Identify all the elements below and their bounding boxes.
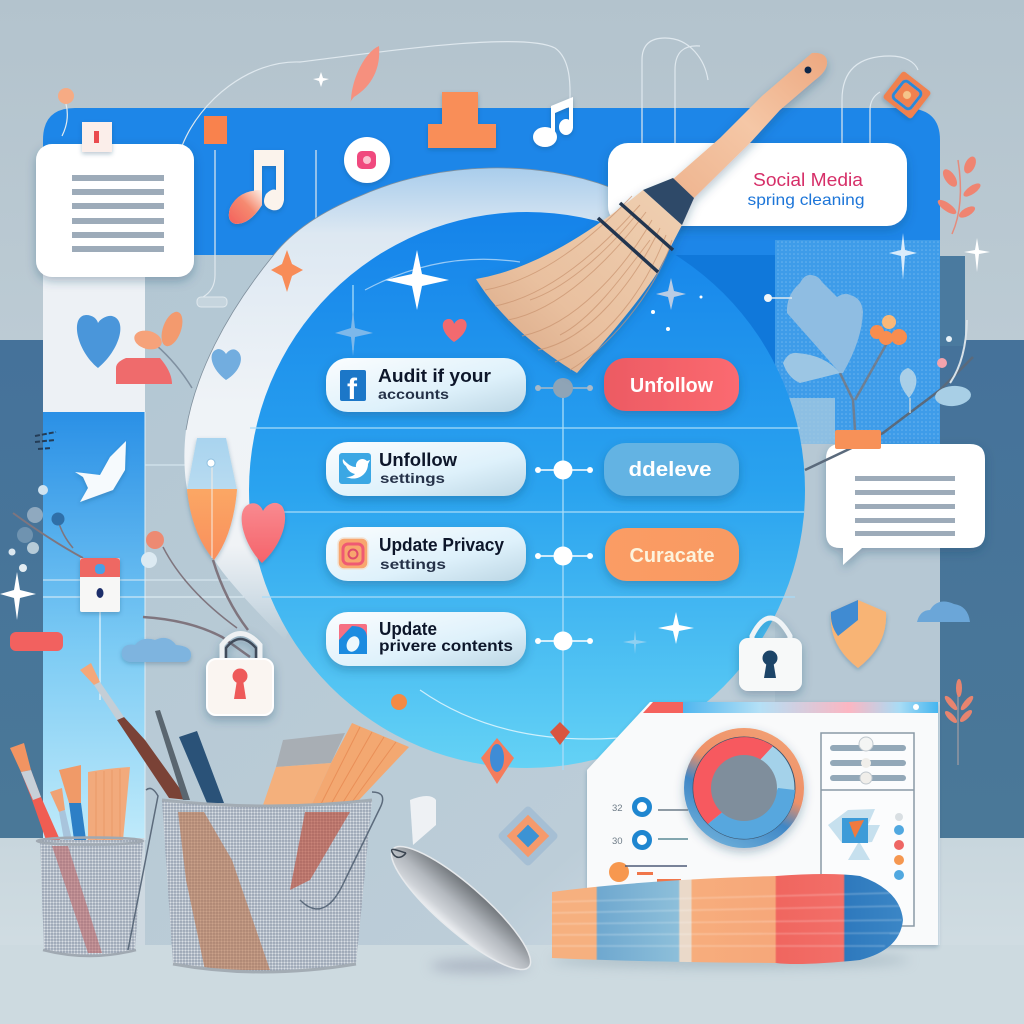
- pill: update contents: privere contents: [379, 638, 513, 655]
- broom: [476, 53, 827, 373]
- bristle strands: [485, 196, 672, 370]
- pill: update privacy: settings: [380, 556, 446, 572]
- flat brushes: [262, 723, 409, 808]
- pill: audit accounts: accounts: [378, 387, 449, 402]
- icon: orange stamp block: [428, 92, 496, 148]
- title card: spring cleaning: [748, 192, 864, 209]
- button: curate: [605, 528, 739, 581]
- icon: sparkle top: [313, 72, 329, 87]
- decorative wire loops: [182, 38, 918, 297]
- broom ferrule: [643, 178, 694, 225]
- row 1: audit accounts: [326, 358, 739, 412]
- pill: unfollow settings: Unfollow: [379, 450, 458, 470]
- title card: [608, 143, 907, 226]
- connector node: [535, 632, 593, 650]
- icon: coral music note: [229, 150, 284, 224]
- pill: unfollow settings: [326, 442, 526, 496]
- connector node: [535, 378, 593, 398]
- title card: Social Media: [753, 170, 864, 190]
- icon: folded paper: [410, 796, 436, 845]
- window top bar: [643, 702, 938, 713]
- donut chart: [684, 728, 804, 848]
- connector node: [535, 546, 593, 566]
- row 4: update private contents: [326, 612, 593, 666]
- pill: audit accounts: f: [347, 373, 358, 406]
- timeline grid lines: [250, 285, 804, 770]
- button: delete: [604, 443, 739, 496]
- brush streaks: [552, 893, 902, 946]
- sparkle stars inside circle: [335, 250, 702, 654]
- left document card: [36, 144, 194, 277]
- tick marks left: [35, 432, 56, 449]
- metal lid: [378, 832, 544, 984]
- main window panel: [43, 108, 940, 945]
- icon: small blue heart: [212, 349, 241, 380]
- icon: white music note: [533, 97, 573, 147]
- button: unfollow: [604, 358, 739, 411]
- broom bands: [598, 203, 673, 272]
- icon: leaf sprig lower right: [943, 679, 975, 765]
- icon: leaf sprig right: [936, 155, 982, 234]
- icon: red diamond on circle: [550, 722, 570, 745]
- small basket rims: [37, 838, 143, 956]
- icon: blue plant illustration: [764, 275, 973, 470]
- pill: update contents: Update: [379, 619, 437, 639]
- red tag on card: [82, 122, 112, 152]
- icon: vase: [187, 438, 237, 560]
- right speech bubble: [826, 444, 985, 565]
- items through mesh: [178, 812, 270, 970]
- icon: colourful tile: [497, 805, 559, 867]
- handle hole: [804, 66, 812, 74]
- heart in circle: [443, 319, 467, 342]
- small mesh basket with brushes: [10, 743, 143, 956]
- pill: update privacy: Update Privacy: [379, 535, 504, 555]
- icon: coral heart: [242, 503, 285, 563]
- icon: blue heart left: [77, 315, 120, 368]
- icon: padlock right: [739, 618, 802, 691]
- sparkles right: [889, 233, 990, 280]
- icon: branches with buds: [8, 485, 250, 657]
- hanging wire tag: [197, 297, 227, 307]
- small basket body: [40, 840, 143, 956]
- pill: audit accounts: Audit if your: [378, 366, 491, 386]
- row 2: unfollow settings: [326, 442, 739, 496]
- icon: instagram circle: [344, 137, 390, 183]
- window body: [587, 702, 938, 945]
- tall brushes: [80, 663, 224, 803]
- icon: twitter bird: [75, 441, 126, 502]
- pill: unfollow settings: settings: [380, 470, 445, 486]
- icon: small flower top left: [58, 88, 74, 136]
- red brush through mesh: [52, 846, 102, 953]
- legend rows: 32: [612, 803, 623, 814]
- icon: red pill: [10, 632, 63, 651]
- pill: update contents: [326, 612, 526, 666]
- button: curate: Curacate: [630, 545, 714, 567]
- icon: orange bead: [391, 694, 407, 710]
- dashboard window: [587, 702, 938, 945]
- icon: gem: [481, 738, 514, 784]
- icon: orange leaves and pill: [116, 309, 192, 388]
- pill: update privacy: [326, 527, 526, 581]
- row 3: update privacy settings: [326, 527, 739, 581]
- legend rows: 30: [612, 836, 623, 847]
- icon: sparkle left: [0, 572, 36, 620]
- broom handle: [672, 53, 827, 198]
- button: delete: ddeleve: [628, 459, 712, 481]
- legend rows: [609, 800, 688, 883]
- small brushes: [10, 743, 130, 840]
- icon: pink feather: [350, 46, 379, 102]
- icon: orange star: [271, 250, 303, 292]
- connector node: [535, 460, 593, 480]
- large striped paint brush: [550, 874, 910, 968]
- pill: audit accounts: [326, 358, 526, 412]
- side settings box: [821, 733, 914, 926]
- large circle with white crescent: [184, 168, 805, 768]
- icon: padlock left: [80, 558, 120, 612]
- icon: shield: [831, 600, 886, 668]
- icon: blue cloud: [122, 638, 191, 662]
- large mesh basket with brushes: [80, 663, 409, 972]
- icon: orange square: [204, 116, 227, 144]
- button: unfollow: Unfollow: [630, 375, 713, 397]
- basket rims and handle: [128, 788, 383, 972]
- broom bristles: [476, 190, 682, 373]
- icon: small cloud right: [917, 602, 970, 622]
- large basket body: [162, 800, 372, 972]
- icon: tile top right: [882, 71, 932, 119]
- icon: padlock center-left: [207, 634, 273, 715]
